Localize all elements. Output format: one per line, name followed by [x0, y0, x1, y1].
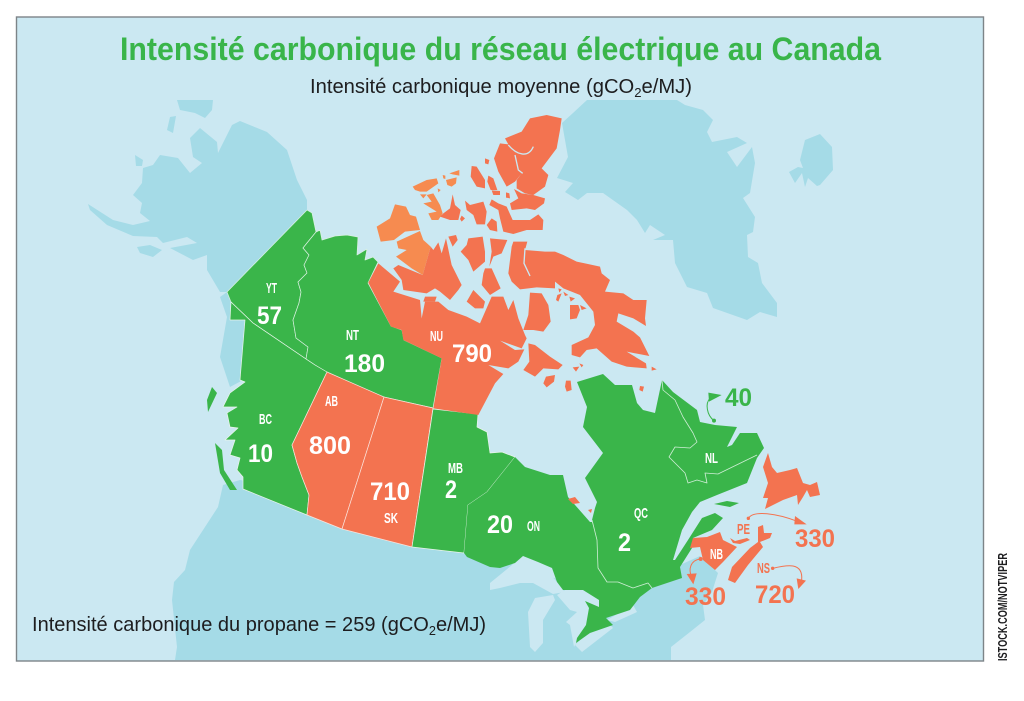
province: Newfoundland: [763, 453, 820, 509]
province: Saskatchewan: [342, 397, 433, 547]
Ontario: ON: [527, 518, 540, 535]
province: Ontario: [464, 457, 652, 643]
arrow: Labrador to 40: [707, 393, 722, 423]
British Columbia: BC: [259, 411, 272, 428]
value: New Brunswick: 330: [685, 583, 726, 611]
Northwest Territories: [344, 327, 385, 378]
Alberta: [309, 393, 351, 460]
province: New Brunswick: [690, 532, 737, 570]
photo credit: ISTOCK.COM/NOTVIPER: [996, 553, 1010, 661]
Newfoundland and Labrador label: NL: [705, 450, 718, 467]
Alberta: AB: [325, 393, 338, 410]
Nunavut: NU: [430, 328, 443, 345]
Iceland: [789, 134, 833, 187]
Manitoba: [445, 460, 463, 504]
Nunavut: 790: [452, 340, 492, 368]
province: Manitoba: [412, 409, 515, 553]
Alberta: 800: [309, 432, 351, 460]
Alaskan islands: [135, 100, 213, 257]
value labels: [248, 280, 835, 611]
arrow: New Brunswick to 330: [687, 557, 703, 584]
Saskatchewan: 710: [370, 478, 410, 506]
province: Yukon: [227, 210, 316, 359]
Queen Elizabeth and western Arctic islands: [377, 115, 562, 308]
Quebec: [618, 505, 648, 557]
propane note: 2: [429, 623, 436, 638]
British Columbia: [248, 411, 273, 468]
Quebec: QC: [634, 505, 648, 522]
province: British Columbia: [223, 302, 327, 515]
New Brunswick label: NB: [710, 546, 723, 563]
Quebec: 2: [618, 529, 631, 557]
arrows: [687, 393, 807, 589]
Baffin and Hudson Bay islands: [508, 242, 657, 392]
Northwest Territories: 180: [344, 350, 385, 378]
British Columbia: 10: [248, 440, 273, 468]
province: Nunavut: [368, 115, 657, 415]
value: Newfoundland and Labrador: 40: [725, 384, 752, 412]
island: Anticosti: [714, 501, 739, 507]
island: Haida Gwaii: [207, 387, 217, 412]
arrow: Nova Scotia to 720: [771, 566, 806, 589]
province: Northwest Territories: [293, 230, 442, 408]
province: Alberta: [292, 372, 384, 529]
island: Vancouver Island: [215, 443, 237, 490]
Northwest Territories Arctic islands: [377, 170, 459, 275]
subtitle: 2: [634, 85, 642, 100]
value: Nova Scotia: 720: [755, 581, 795, 609]
Greenland: [557, 100, 777, 320]
Northwest Territories: NT: [346, 327, 359, 344]
Manitoba: MB: [448, 460, 463, 477]
province: Quebec: [577, 374, 764, 588]
arrow: Prince Edward Island to 330: [747, 514, 807, 524]
province: Prince Edward Island: [730, 538, 750, 544]
Alaska: [88, 121, 307, 387]
propane note: e/MJ): [436, 613, 486, 636]
Yukon: [257, 280, 282, 330]
map: provinces and territories: [207, 115, 820, 643]
Ontario: 20: [487, 511, 513, 539]
Prince Edward Island label: PE: [737, 521, 750, 538]
Saskatchewan: SK: [384, 510, 398, 527]
value: Prince Edward Island: 330: [795, 525, 835, 553]
title: Intensité carbonique du réseau électrique au Canada: [120, 31, 881, 67]
Yukon: YT: [266, 280, 277, 297]
Nunavut mainland: [368, 263, 527, 415]
Yukon: 57: [257, 302, 282, 330]
subtitle: Intensité carbonique moyenne (gCO: [310, 76, 631, 98]
border: Quebec Ontario: [592, 520, 652, 588]
province: Nova Scotia: [728, 525, 772, 583]
Saskatchewan: [370, 478, 410, 527]
small islands in James Bay: [568, 497, 592, 513]
neighbouring land masses: [88, 100, 833, 660]
Great Lakes: [490, 556, 637, 652]
subtitle: e/MJ): [642, 76, 692, 98]
Manitoba: 2: [445, 476, 457, 504]
Nova Scotia label: NS: [757, 560, 770, 577]
border: Quebec Labrador: [662, 380, 757, 483]
Nunavut: [430, 328, 492, 368]
Victoria Strait island: [423, 297, 437, 302]
propane note: Intensité carbonique du propane = 259 (gCO: [32, 613, 438, 636]
Ellesmere fjords: [508, 145, 533, 173]
United States: [172, 480, 718, 660]
Baffin inlet: [524, 248, 530, 276]
Ontario: [487, 511, 540, 539]
